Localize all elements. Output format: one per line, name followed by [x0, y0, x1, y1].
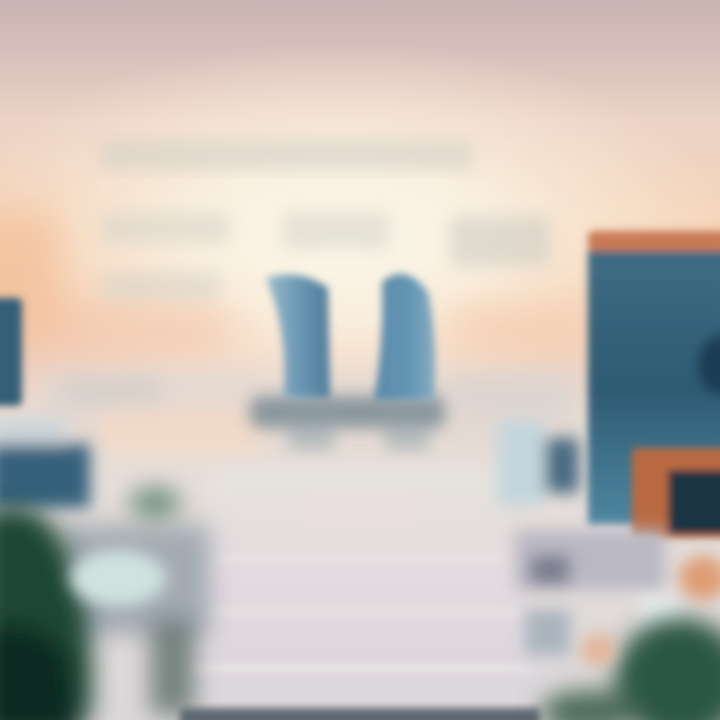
ghost title panel [100, 140, 472, 170]
orange framed entrance [632, 448, 720, 538]
right large building [588, 231, 720, 525]
tower base on the water [250, 396, 445, 450]
left shaded ground [60, 525, 210, 715]
left orange haze [0, 210, 580, 350]
ghost panel: lower left [102, 272, 220, 300]
right orange blossoms [580, 556, 720, 666]
central sky glow [0, 40, 720, 440]
left lower building [0, 418, 90, 508]
ghost stat panels [100, 212, 550, 300]
dark lower edge [180, 708, 540, 720]
ghost panel: left [100, 212, 230, 244]
ghost panel: right [450, 216, 550, 266]
left foreground foliage [0, 487, 181, 720]
promenade walkway [180, 470, 545, 700]
walkway bands [190, 490, 530, 672]
water reflecting the sky [40, 372, 580, 452]
dark window area [698, 335, 720, 395]
left white planter [70, 550, 166, 606]
left distant building [0, 298, 22, 406]
right foreground foliage [540, 618, 720, 720]
left tower [266, 275, 330, 398]
twin towers [266, 274, 435, 400]
orange roof [588, 231, 720, 251]
ghost panel: middle [282, 212, 390, 250]
right tower [374, 274, 435, 400]
right low pavilions [498, 420, 680, 655]
